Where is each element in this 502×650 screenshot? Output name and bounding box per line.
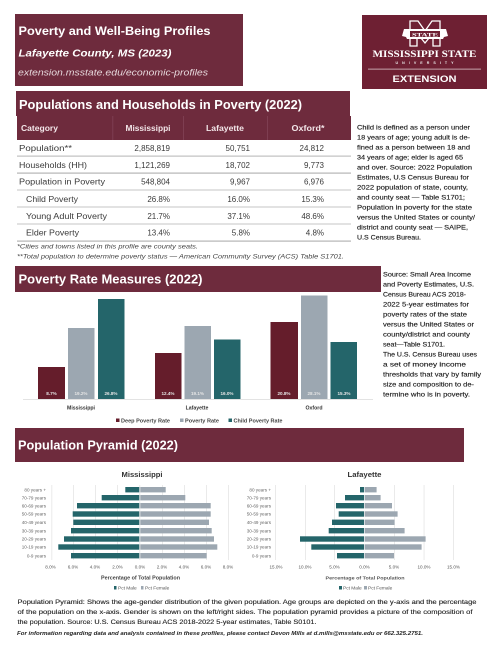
row: child poverty: 15.3% — [301, 195, 324, 204]
age labels: 20-29 years — [22, 537, 47, 542]
axis title: Percentage of Total Population — [101, 575, 180, 581]
male bars — [58, 487, 139, 558]
age labels — [22, 487, 47, 558]
row: elder poverty: 13.4% — [147, 228, 170, 238]
row: child poverty — [26, 195, 324, 204]
row: young adult poverty: 21.7% — [147, 212, 170, 221]
x axis labels: 2.0% — [157, 564, 167, 570]
logo: Mississippi State University Extension: MISSISSIPPI STATE — [372, 49, 476, 59]
row: population in poverty: Population in Poverty — [19, 178, 105, 186]
x axis labels: 0.0% — [135, 564, 145, 570]
row: population: Population** — [19, 144, 72, 153]
x axis labels: 15.0% — [447, 564, 460, 570]
text block: definitions and sources: Child is defined as a person under — [357, 124, 471, 132]
x axis labels: 4.0% — [179, 564, 189, 570]
heading: population pyramid — [15, 428, 464, 462]
text block: definitions and sources: and over. Source: 2022 Population — [357, 164, 472, 172]
axis title: Percentage of Total Population — [326, 575, 405, 581]
website link: extension.msstate.edu/economic-profiles — [18, 68, 208, 78]
text block: poverty rate source: poverty rates of the state — [383, 312, 467, 318]
x axis labels: 8.0% — [45, 564, 56, 570]
text block: poverty rate source: thresholds that vary by family — [383, 372, 482, 378]
row: elder poverty: 4.8% — [306, 228, 324, 238]
text block: poverty rate source: versus the United States or — [383, 322, 475, 328]
x axis labels: 6.0% — [68, 564, 78, 570]
text block: poverty rate source: size and composition to de- — [383, 382, 474, 388]
row: households: 9,773 — [304, 161, 325, 170]
age labels: 0-9 years — [27, 553, 47, 558]
age labels: 60-69 years — [247, 503, 272, 508]
logo: Mississippi State University Extension — [362, 15, 487, 89]
bars: Oxford: 15.3% — [337, 391, 351, 396]
text block: poverty rate source: Source: Small Area Income — [383, 272, 471, 278]
legend — [114, 585, 170, 591]
chart legend: Deep Poverty Rate — [121, 418, 170, 424]
text block: population pyramid explanation: of the population on the x-axis. Gender is shown on the left/right sides. The population pyramid provides a picture of the composition of — [18, 609, 473, 616]
bars: Oxford: Oxford — [305, 406, 323, 412]
text block: definitions and sources: and county seat — Table S1701; — [357, 194, 465, 202]
x axis labels: 10.0% — [298, 564, 312, 570]
text block: definitions and sources: versus the United States or county/ — [357, 214, 475, 222]
age labels: 50-59 years — [247, 512, 272, 517]
bars: Mississippi: Mississippi — [67, 406, 96, 412]
row: young adult poverty: 37.1% — [227, 212, 250, 221]
chart title: Lafayette — [348, 470, 382, 479]
text block: definitions and sources: fined as a person between 18 and — [357, 144, 470, 152]
text block: definitions and sources — [357, 124, 475, 242]
panel: title header — [15, 14, 243, 86]
heading: poverty rate measures: Poverty Rate Measures (2022) — [18, 272, 202, 286]
row: population in poverty: 9,967 — [230, 178, 251, 186]
x axis labels: 6.0% — [201, 564, 211, 570]
table header row: Oxford* — [292, 124, 325, 133]
bars: Oxford: 20.8% — [277, 391, 291, 396]
x axis labels — [269, 564, 460, 570]
age labels: 80 years + — [249, 487, 271, 492]
age labels: 40-49 years — [247, 520, 272, 525]
female bars — [365, 487, 426, 558]
bars: Lafayette — [155, 326, 240, 412]
text block: definitions and sources: district and county seat — SAIPE, — [357, 224, 468, 232]
logo: Mississippi State University Extension: EXTENSION — [392, 74, 457, 85]
row: population: 50,751 — [226, 144, 251, 153]
age labels: 80 years + — [24, 487, 46, 492]
legend: Pct Female — [145, 585, 170, 591]
x axis labels: 5.0% — [389, 564, 399, 570]
text block: poverty rate source: 2022 5-year estimates for — [383, 302, 470, 308]
logo: Mississippi State University Extension: UNIVERSITY — [396, 61, 454, 65]
female bars — [140, 487, 217, 558]
text block: poverty rate source: Census Bureau ACS 2018- — [383, 292, 466, 298]
text block: poverty rate source: seat—Table S1701. — [383, 342, 445, 348]
text block: population pyramid explanation: Population Pyramid: Shows the age-gender distribution of the given population. Age groups are depicted on the y-axis and the percentage — [18, 599, 477, 606]
x axis labels: 0.0% — [359, 564, 370, 570]
heading: poverty rate measures — [15, 266, 381, 292]
bar chart: poverty rate measures — [23, 296, 373, 424]
bars: Lafayette: 12.4% — [161, 391, 175, 396]
row: elder poverty: Elder Poverty — [26, 228, 79, 238]
age labels — [247, 487, 272, 558]
row: population: 2,858,819 — [134, 144, 171, 153]
x axis labels: 15.0% — [269, 564, 283, 570]
chart legend — [116, 418, 283, 424]
row: child poverty: Child Poverty — [26, 195, 78, 204]
age labels: 30-39 years — [22, 528, 47, 533]
heading: populations and households in poverty: Populations and Households in Poverty (2022) — [19, 97, 302, 112]
county subtitle: Lafayette County, MS (2023) — [18, 48, 172, 60]
table header row: Mississippi — [126, 124, 170, 133]
row: young adult poverty: 48.6% — [301, 212, 324, 221]
age labels: 60-69 years — [22, 503, 47, 508]
row: child poverty: 16.0% — [227, 195, 250, 204]
text block: poverty rate source: county/district and county — [383, 332, 471, 338]
row: child poverty: 26.8% — [147, 195, 170, 204]
chart: Lafayette population pyramid — [247, 470, 460, 591]
text block: poverty rate source: termine who is in poverty. — [383, 392, 470, 398]
bars: Lafayette: 19.1% — [191, 391, 204, 396]
bars: Lafayette: Lafayette — [186, 406, 209, 412]
male bars — [300, 487, 364, 558]
age labels: 0-9 years — [252, 553, 272, 558]
row: households — [19, 161, 325, 170]
table footnotes: *Cities and towns listed in this profile are county seats. — [17, 244, 198, 250]
table header row: Lafayette — [206, 124, 245, 133]
age labels: 30-39 years — [247, 528, 272, 533]
text block: definitions and sources: 34 years of age; elder is aged 65 — [357, 154, 463, 162]
text block: definitions and sources: Population in poverty for the state — [357, 204, 472, 212]
chart: Mississippi population pyramid — [22, 470, 233, 591]
x axis labels: 2.0% — [112, 564, 123, 570]
age labels: 40-49 years — [22, 520, 47, 525]
legend — [339, 585, 393, 591]
text block: definitions and sources: 2022 population of state, county, — [357, 184, 468, 192]
heading: populations and households in poverty — [16, 91, 350, 116]
row: elder poverty — [26, 228, 324, 238]
x axis labels: 5.0% — [329, 564, 340, 570]
row: households: 1,121,269 — [134, 161, 171, 170]
table footnotes: **Total population to determine poverty status — American Community Survey (ACS) Table S1701. — [17, 254, 344, 260]
bars: Mississippi: 26.8% — [104, 391, 118, 396]
x axis labels — [45, 564, 233, 570]
row: young adult poverty — [26, 212, 324, 221]
icon: M with state banner: STATE — [412, 32, 438, 38]
text block: population pyramid explanation — [18, 599, 477, 626]
row: population in poverty — [19, 178, 325, 186]
bars: Oxford: 28.1% — [307, 391, 321, 396]
row: population — [19, 144, 325, 153]
bars: Mississippi — [38, 299, 124, 412]
heading: population pyramid: Population Pyramid (2022) — [18, 438, 178, 452]
age labels: 10-19 years — [22, 545, 47, 550]
chart legend: Poverty Rate — [185, 418, 219, 424]
x axis labels: 8.0% — [223, 564, 233, 570]
row: population: 24,812 — [300, 144, 325, 153]
x axis labels: 4.0% — [90, 564, 100, 570]
row: households: 18,702 — [226, 161, 251, 170]
text block: poverty rate source — [383, 272, 482, 398]
row: population in poverty: 548,804 — [141, 178, 171, 186]
age labels: 50-59 years — [22, 512, 47, 517]
table footnotes — [17, 244, 344, 260]
chart title: Mississippi — [122, 470, 162, 479]
row: young adult poverty: Young Adult Poverty — [26, 212, 107, 221]
age labels: 10-19 years — [247, 545, 272, 550]
age labels: 20-29 years — [247, 537, 272, 542]
bars: Mississippi: 8.7% — [46, 391, 57, 396]
text block: definitions and sources: Estimates, U.S Census Bureau for — [357, 174, 470, 182]
bars: Oxford — [270, 296, 357, 412]
row: population in poverty: 6,976 — [304, 178, 325, 186]
text block: poverty rate source: The U.S. Census Bureau uses — [383, 352, 478, 358]
legend: Pct Female — [368, 585, 393, 591]
x axis labels: 10.0% — [417, 564, 431, 570]
age labels: 70-79 years — [247, 495, 272, 500]
legend: Pct Male — [118, 585, 137, 591]
text block: poverty rate source: and Poverty Estimates, U.S. — [383, 282, 474, 288]
legend: Pct Male — [343, 585, 362, 591]
text block: definitions and sources: U.S Census Bureau. — [357, 234, 421, 242]
table: poverty statistics — [17, 116, 351, 242]
row: households: Households (HH) — [19, 161, 87, 170]
title: Poverty and Well-Being Profiles — [18, 26, 210, 38]
text block: definitions and sources: 18 years of age; young adult is de- — [357, 134, 470, 142]
contact line: For information regarding data and analysis contained in these profiles, please contact Devon Mills at d.mills@msstate.edu or 662.325.2751. — [17, 631, 423, 637]
text block: population pyramid explanation: the population. Source: U.S. Census Bureau ACS 2018-2022 5-year estimates, Table S0101. — [18, 619, 317, 626]
age labels: 70-79 years — [22, 495, 47, 500]
text block: poverty rate source: a set of money income — [383, 362, 466, 368]
row: elder poverty: 5.8% — [232, 228, 250, 238]
table header row — [17, 116, 351, 140]
table header row: Category — [21, 124, 59, 133]
bars: Lafayette: 16.0% — [220, 391, 234, 396]
chart legend: Child Poverty Rate — [234, 418, 283, 424]
bars: Mississippi: 19.2% — [74, 391, 88, 396]
